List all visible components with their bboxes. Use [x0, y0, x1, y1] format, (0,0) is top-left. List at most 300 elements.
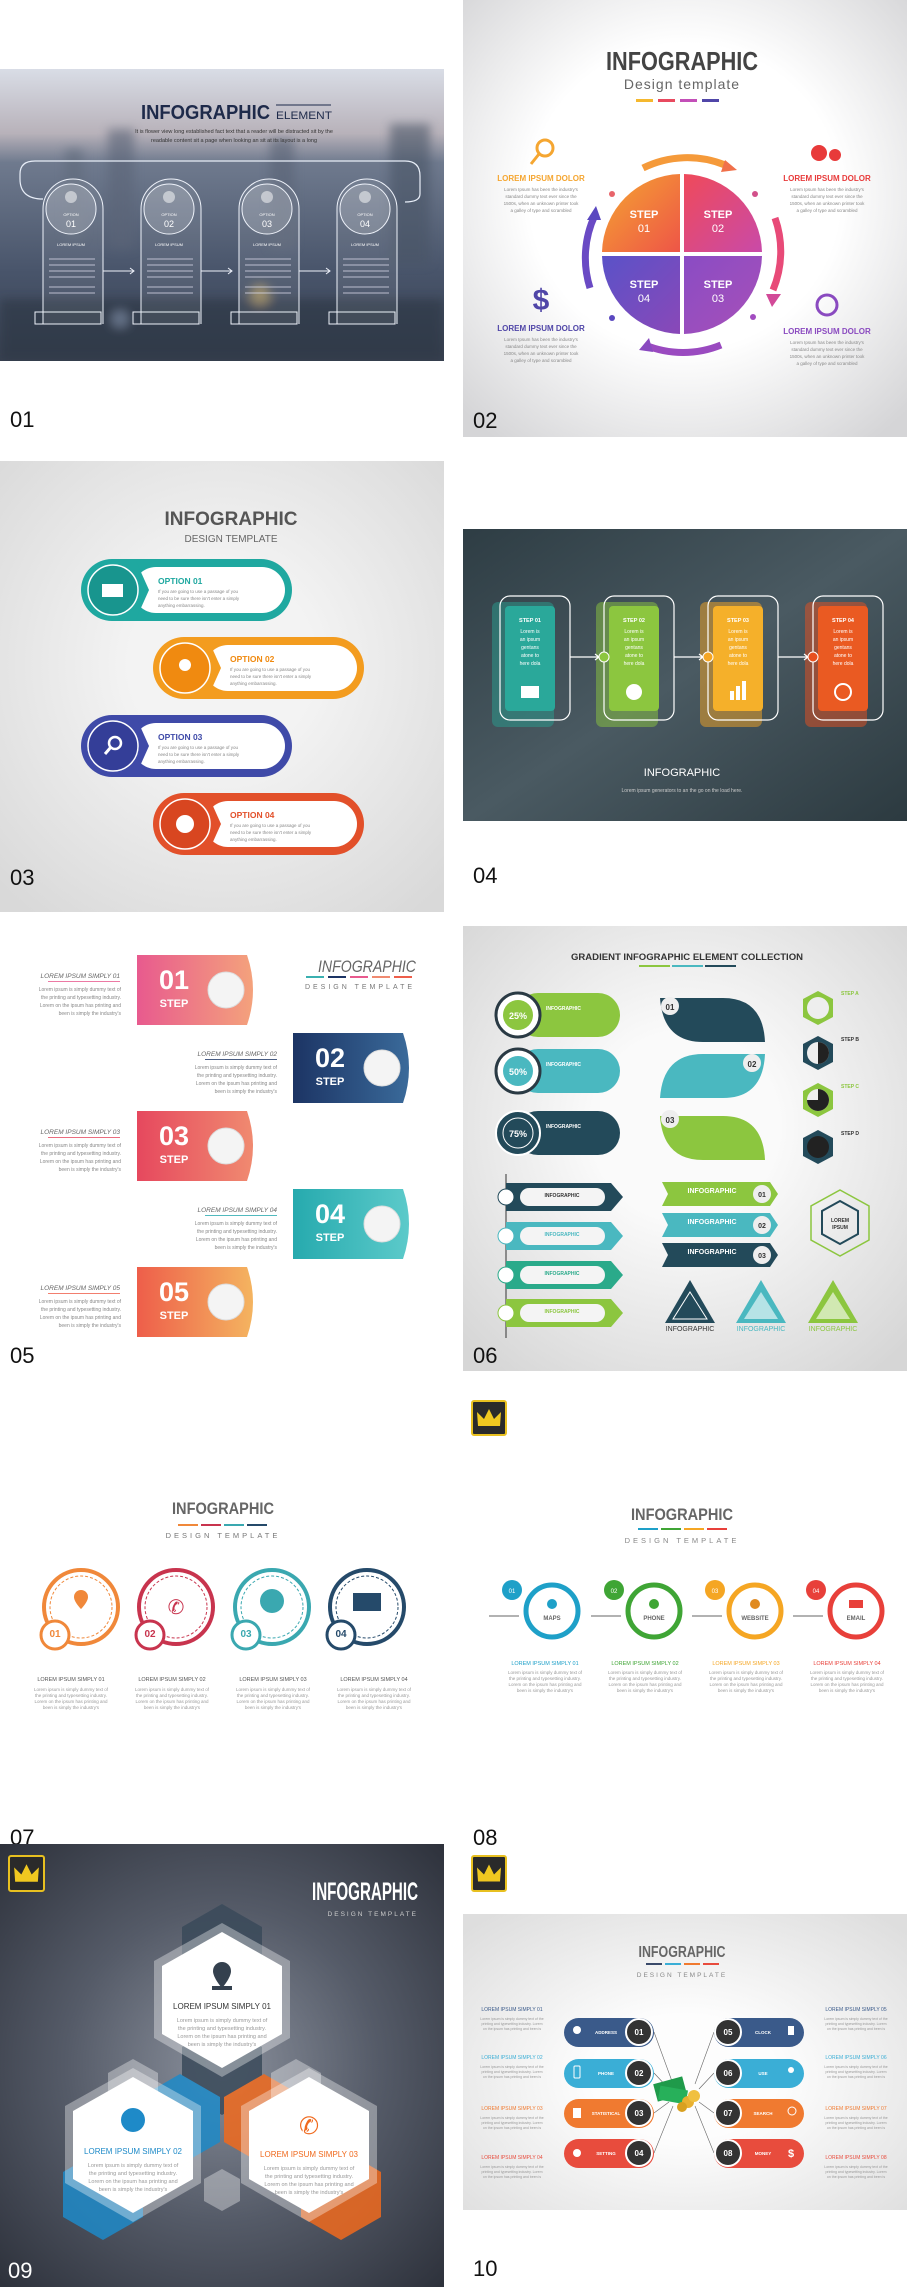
option cards: OPTION [259, 212, 275, 217]
hex top: the printing and typesetting industry. [178, 2026, 266, 2032]
option 01: need to be sure there isn't enter a simply [158, 596, 240, 601]
icon: gears [811, 145, 841, 161]
hex bottom-right: Lorem ipsum is simply dummy text of [264, 2166, 355, 2172]
label 02: 02 [473, 408, 497, 433]
step cards: an ipsum [624, 637, 644, 643]
option cards: OPTION [63, 212, 79, 217]
arrow tags left: INFOGRAPHIC [544, 1232, 580, 1238]
step texts: Lorem ipsum is simply dummy text of [608, 1670, 683, 1675]
ribbon tags right: INFOGRAPHIC [688, 1219, 736, 1226]
icon: magnifier [531, 140, 553, 164]
puzzle circle [602, 174, 762, 334]
option 03: If you are going to use a passage of you [158, 745, 239, 750]
title: DESIGN TEMPLATE [625, 1536, 739, 1545]
contact circles: 04 [813, 1589, 820, 1595]
puzzle circle: STEP [704, 279, 732, 291]
step texts: the printing and typesetting industry. [136, 1693, 208, 1698]
text blocks: a galley of type and scrambled [796, 208, 858, 213]
right pills: CLOCK [755, 2030, 772, 2035]
text blocks: standard dummy text ever since the [505, 194, 577, 199]
title: INFOGRAPHIC [318, 957, 417, 976]
right pills: 08 [724, 2149, 733, 2158]
contact circles: MAPS [543, 1616, 561, 1622]
step texts: Lorem on the ipsum has printing and [40, 1315, 121, 1321]
text blocks: Lorem Ipsum has been the industry's [504, 337, 579, 342]
hex top: been is simply the industry's [188, 2042, 257, 2048]
hex bottom-right: LOREM IPSUM SIMPLY 03 [260, 2150, 359, 2159]
step cards: gentans [625, 645, 643, 651]
step texts: Lorem on the ipsum has printing and [508, 1682, 582, 1687]
title [166, 1499, 280, 1540]
panel 03: option pills [0, 461, 444, 912]
hex top: LOREM IPSUM SIMPLY 01 [173, 2002, 272, 2011]
title: ELEMENT [276, 110, 332, 122]
ribbon tags right: LOREM [831, 1218, 849, 1224]
step texts: been is simply the industry's [346, 1705, 403, 1710]
option 01: If you are going to use a passage of you [158, 589, 239, 594]
left pills: PHONE [598, 2071, 614, 2076]
arrow tags left [498, 1174, 623, 1338]
step texts: been is simply the industry's [59, 1011, 121, 1017]
side texts [480, 2007, 888, 2179]
triangles: INFOGRAPHIC [737, 1326, 785, 1333]
side texts: LOREM IPSUM SIMPLY 05 [825, 2007, 887, 2013]
step texts: Lorem on the ipsum has printing and [135, 1699, 209, 1704]
title: DESIGN TEMPLATE [185, 534, 278, 545]
step cards: gentans [521, 645, 539, 651]
step texts: been is simply the industry's [819, 1688, 876, 1693]
option 04: OPTION 04 [230, 810, 275, 820]
side texts: Lorem ipsum is simply dummy text of the [824, 2165, 888, 2169]
title: DESIGN TEMPLATE [637, 1972, 727, 1979]
step texts: LOREM IPSUM SIMPLY 01 [41, 973, 120, 980]
option cards: 03 [262, 219, 272, 229]
step texts: Lorem ipsum is simply dummy text of [39, 1299, 122, 1305]
percentage pills: INFOGRAPHIC [546, 1124, 581, 1130]
side texts: LOREM IPSUM SIMPLY 01 [481, 2007, 543, 2013]
option 02: anything embarrassing. [230, 681, 277, 686]
step texts: the printing and typesetting industry. [197, 1073, 277, 1079]
label 08: 08 [473, 1825, 497, 1850]
side texts: LOREM IPSUM SIMPLY 07 [825, 2106, 887, 2112]
step 04 [293, 1189, 409, 1259]
title [305, 957, 417, 991]
title [625, 1505, 739, 1545]
ribbon tags right: INFOGRAPHIC [688, 1188, 736, 1195]
icon: alarm clock [817, 295, 837, 315]
left pills: 03 [635, 2109, 644, 2118]
option 04: anything embarrassing. [230, 837, 277, 842]
text blocks: standard dummy text ever since the [505, 344, 577, 349]
step texts [508, 1661, 885, 1693]
step texts: Lorem on the ipsum has printing and [40, 1003, 121, 1009]
step texts: Lorem on the ipsum has printing and [709, 1682, 783, 1687]
step texts: been is simply the industry's [59, 1323, 121, 1329]
step cards [492, 596, 883, 727]
step cards: here dola [624, 661, 645, 667]
step cards: an ipsum [728, 637, 748, 643]
step cards: gentans [729, 645, 747, 651]
hex bottom-left: Lorem on the ipsum has printing and [88, 2179, 178, 2185]
text blocks: a galley of type and scrambled [510, 358, 572, 363]
step texts: Lorem on the ipsum has printing and [34, 1699, 108, 1704]
hex bottom-right: Lorem on the ipsum has printing and [264, 2182, 354, 2188]
step cards: Lorem is [833, 629, 853, 635]
text blocks: 1500s, when an unknown printer took [790, 201, 865, 206]
side texts: LOREM IPSUM SIMPLY 04 [481, 2155, 543, 2161]
side texts: Lorem ipsum is simply dummy text of the [824, 2116, 888, 2120]
hexagon steps [803, 991, 859, 1164]
text blocks: LOREM IPSUM DOLOR [783, 174, 871, 183]
side texts: LOREM IPSUM SIMPLY 03 [481, 2106, 543, 2112]
step texts: the printing and typesetting industry. [609, 1676, 681, 1681]
step texts: been is simply the industry's [718, 1688, 775, 1693]
hexagon steps: STEP D [841, 1131, 859, 1137]
text blocks [497, 174, 871, 366]
step texts: LOREM IPSUM SIMPLY 03 [41, 1129, 120, 1136]
title [312, 1878, 418, 1918]
percentage pills: 50% [509, 1067, 527, 1077]
option cards: 01 [66, 219, 76, 229]
crown badge 1 [471, 1400, 507, 1436]
icon: money stack [653, 2076, 700, 2112]
connector arrows [570, 654, 808, 660]
connector lines [654, 2032, 714, 2153]
label 03: 03 [10, 865, 34, 890]
step cards: an ipsum [833, 637, 853, 643]
step cards: here dola [520, 661, 541, 667]
label 01: 01 [10, 407, 34, 432]
step texts: been is simply the industry's [215, 1089, 277, 1095]
label 09: 09 [8, 2258, 32, 2283]
hex bottom-right [241, 2068, 377, 2222]
side texts: Lorem ipsum is simply dummy text of the [480, 2065, 544, 2069]
side texts: LOREM IPSUM SIMPLY 02 [481, 2055, 543, 2061]
step texts: Lorem ipsum is simply dummy text of [195, 1221, 278, 1227]
hex bottom-left [65, 2068, 201, 2222]
step texts: the printing and typesetting industry. [197, 1229, 277, 1235]
step 01: 01 [159, 965, 189, 995]
step texts: Lorem ipsum is simply dummy text of [135, 1687, 210, 1692]
ribbon tags right: IPSUM [832, 1225, 848, 1231]
side texts: printing and typesetting industry. Lorem [825, 2022, 887, 2026]
step texts: the printing and typesetting industry. [41, 1151, 121, 1157]
title: Lorem ipsum generators to an the go on the load here. [622, 788, 742, 794]
panel 01: glass infographic element on city background [0, 69, 444, 361]
step texts: the printing and typesetting industry. [41, 995, 121, 1001]
option cards: LOREM IPSUM [155, 242, 183, 247]
ribbon tags right: 03 [758, 1253, 766, 1260]
step cards: atone to [625, 653, 643, 659]
step texts: Lorem on the ipsum has printing and [196, 1237, 277, 1243]
side texts: printing and typesetting industry. Lorem [481, 2070, 543, 2074]
left pills: 04 [635, 2149, 644, 2158]
side texts: LOREM IPSUM SIMPLY 08 [825, 2155, 887, 2161]
text blocks: standard dummy text ever since the [791, 194, 863, 199]
step texts: LOREM IPSUM SIMPLY 02 [611, 1661, 679, 1667]
left pills [564, 2018, 654, 2168]
leaf shapes [660, 997, 765, 1160]
text blocks: a galley of type and scrambled [510, 208, 572, 213]
left pills: ADDRESS [595, 2030, 617, 2035]
right pills: 06 [724, 2069, 733, 2078]
title [164, 509, 298, 545]
step texts: the printing and typesetting industry. [35, 1693, 107, 1698]
side texts: Lorem ipsum is simply dummy text of the [480, 2116, 544, 2120]
puzzle circle: 03 [712, 293, 724, 305]
option 02: OPTION 02 [230, 654, 275, 664]
title: DESIGN TEMPLATE [305, 984, 415, 991]
contact circles: WEBSITE [741, 1616, 769, 1622]
text blocks: standard dummy text ever since the [791, 347, 863, 352]
side texts: printing and typesetting industry. Lorem [481, 2022, 543, 2026]
title: INFOGRAPHIC [141, 102, 270, 124]
step 03 [137, 1111, 253, 1181]
panel 05: step blocks [10, 955, 417, 1368]
step cards: Lorem is [624, 629, 644, 635]
step texts: LOREM IPSUM SIMPLY 05 [41, 1285, 120, 1292]
leaf shapes: 03 [666, 1116, 675, 1125]
side texts: on the ipsum has printing and been is [483, 2075, 541, 2079]
hexagon steps: STEP B [841, 1037, 859, 1043]
step cards: Lorem is [728, 629, 748, 635]
percentage pills: INFOGRAPHIC [546, 1006, 581, 1012]
step 03: 03 [159, 1121, 189, 1151]
contact circles: EMAIL [847, 1616, 866, 1622]
title: INFOGRAPHIC [172, 1499, 274, 1518]
panel 06: gradient infographic element collection [463, 926, 907, 1371]
step texts: Lorem ipsum is simply dummy text of [337, 1687, 412, 1692]
side texts: on the ipsum has printing and been is [483, 2027, 541, 2031]
title: INFOGRAPHIC [638, 1944, 726, 1961]
option cards: 02 [164, 219, 174, 229]
step texts: Lorem ipsum is simply dummy text of [39, 1143, 122, 1149]
title: INFOGRAPHIC [606, 46, 758, 76]
step texts: been is simply the industry's [59, 1167, 121, 1173]
hexagon steps: STEP A [841, 991, 859, 997]
side texts: on the ipsum has printing and been is [483, 2126, 541, 2130]
text blocks: LOREM IPSUM DOLOR [497, 324, 585, 333]
triangles [665, 1280, 858, 1333]
step cards: an ipsum [520, 637, 540, 643]
panel 08: contact circles [489, 1505, 885, 1693]
step texts: LOREM IPSUM SIMPLY 04 [198, 1207, 277, 1214]
right pills [714, 2018, 804, 2168]
ribbon tags right: INFOGRAPHIC [688, 1249, 736, 1256]
side texts: on the ipsum has printing and been is [827, 2126, 885, 2130]
step texts: been is simply the industry's [144, 1705, 201, 1710]
option cards: OPTION [357, 212, 373, 217]
step texts: LOREM IPSUM SIMPLY 04 [813, 1661, 881, 1667]
step cards: STEP 03 [727, 618, 749, 624]
right pills: 07 [724, 2109, 733, 2118]
circles: 01 [49, 1629, 61, 1640]
arrow tags left: INFOGRAPHIC [544, 1309, 580, 1315]
option cards: OPTION [161, 212, 177, 217]
option 02 [153, 637, 364, 699]
step texts: been is simply the industry's [617, 1688, 674, 1693]
hex bottom-right: the printing and typesetting industry. [265, 2174, 353, 2180]
hex top: Lorem on the ipsum has printing and [177, 2034, 267, 2040]
step texts: Lorem on the ipsum has printing and [196, 1081, 277, 1087]
side texts: printing and typesetting industry. Lorem [825, 2121, 887, 2125]
contact circles [489, 1580, 882, 1637]
step 04: 04 [315, 1199, 345, 1229]
panel 04: step cards on dark photo [463, 529, 907, 821]
step 01: STEP [160, 998, 188, 1010]
percentage pills: INFOGRAPHIC [546, 1062, 581, 1068]
option 04: need to be sure there isn't enter a simply [230, 830, 312, 835]
step texts: Lorem ipsum is simply dummy text of [39, 987, 122, 993]
label 04: 04 [473, 863, 497, 888]
step cards: gentans [834, 645, 852, 651]
side texts: Lorem ipsum is simply dummy text of the [824, 2065, 888, 2069]
text blocks: 1500s, when an unknown printer took [504, 351, 579, 356]
title: INFOGRAPHIC [164, 509, 298, 530]
label 05: 05 [10, 1343, 34, 1368]
step cards: STEP 02 [623, 618, 645, 624]
option 01 [81, 559, 292, 621]
option 03 [81, 715, 292, 777]
option cards: LOREM IPSUM [253, 242, 281, 247]
step texts: been is simply the industry's [517, 1688, 574, 1693]
circles: 02 [144, 1629, 156, 1640]
puzzle circle: 02 [712, 223, 724, 235]
step texts: LOREM IPSUM SIMPLY 03 [239, 1677, 307, 1683]
option cards [35, 179, 397, 324]
step texts: been is simply the industry's [215, 1245, 277, 1251]
step cards: Lorem is [520, 629, 540, 635]
step 05: 05 [159, 1277, 189, 1307]
step 05 [137, 1267, 253, 1337]
right pills: USE [758, 2071, 768, 2076]
label 06: 06 [473, 1343, 497, 1368]
circles [41, 1570, 404, 1649]
puzzle circle: 01 [638, 223, 650, 235]
panel 02: puzzle circle infographic [463, 0, 907, 437]
subtitle text: readable content sit a page when looking an sit at its layout is a long [151, 138, 317, 144]
crown badge 2 [8, 1855, 45, 1892]
triangles: INFOGRAPHIC [809, 1326, 857, 1333]
right pills: MONEY [755, 2151, 771, 2156]
label 07: 07 [10, 1825, 34, 1850]
puzzle circle: STEP [630, 279, 658, 291]
step cards: here dola [833, 661, 854, 667]
hex bottom-left: the printing and typesetting industry. [89, 2171, 177, 2177]
step texts: Lorem ipsum is simply dummy text of [508, 1670, 583, 1675]
subtitle text: It is flower view long established fact text that a reader will be distracted sit by the [135, 129, 333, 135]
puzzle circle: STEP [704, 209, 732, 221]
hex bottom-left: been is simply the industry's [99, 2187, 168, 2193]
step texts: the printing and typesetting industry. [509, 1676, 581, 1681]
panel 09: hexagon infographic on dark [0, 1844, 444, 2287]
step cards: STEP 01 [519, 618, 541, 624]
step texts: Lorem on the ipsum has printing and [608, 1682, 682, 1687]
circles: 03 [240, 1629, 252, 1640]
step 05: STEP [160, 1310, 188, 1322]
contact circles: 03 [712, 1589, 719, 1595]
arrow tags left: INFOGRAPHIC [544, 1271, 580, 1277]
step texts: been is simply the industry's [43, 1705, 100, 1710]
icon: dollar: $ [533, 284, 550, 317]
step 03: STEP [160, 1154, 188, 1166]
step cards: STEP 04 [832, 618, 855, 624]
left pills: 01 [635, 2028, 644, 2037]
option 01: OPTION 01 [158, 576, 203, 586]
left pills: 02 [635, 2069, 644, 2078]
ribbon tags right: 01 [758, 1192, 766, 1199]
text blocks: a galley of type and scrambled [796, 361, 858, 366]
option 04: If you are going to use a passage of you [230, 823, 311, 828]
left pills: SETTING [596, 2151, 616, 2156]
circles: ✆ [168, 1597, 184, 1619]
title: DESIGN TEMPLATE [166, 1531, 280, 1540]
title: INFOGRAPHIC [644, 767, 720, 779]
step texts: LOREM IPSUM SIMPLY 04 [340, 1677, 408, 1683]
text blocks: LOREM IPSUM DOLOR [783, 327, 871, 336]
percentage pills: 75% [509, 1129, 527, 1139]
text blocks: Lorem Ipsum has been the industry's [790, 340, 865, 345]
label 10: 10 [473, 2256, 497, 2281]
subtitle text [135, 129, 333, 144]
contact circles: PHONE [643, 1616, 665, 1622]
percentage pills: 25% [509, 1011, 527, 1021]
option cards: 04 [360, 219, 370, 229]
title: Design template [624, 76, 740, 92]
step texts: Lorem ipsum is simply dummy text of [810, 1670, 885, 1675]
step cards: atone to [834, 653, 852, 659]
side texts: on the ipsum has printing and been is [827, 2075, 885, 2079]
step texts: LOREM IPSUM SIMPLY 01 [37, 1677, 105, 1683]
triangles: INFOGRAPHIC [666, 1326, 714, 1333]
hex top [154, 1923, 290, 2077]
step 02: 02 [315, 1043, 345, 1073]
puzzle circle: 04 [638, 293, 650, 305]
side texts: printing and typesetting industry. Lorem [825, 2070, 887, 2074]
hex top: Lorem ipsum is simply dummy text of [177, 2018, 268, 2024]
title: GRADIENT INFOGRAPHIC ELEMENT COLLECTION [571, 952, 803, 963]
option 03: anything embarrassing. [158, 759, 205, 764]
option 02: If you are going to use a passage of you [230, 667, 311, 672]
text blocks: 1500s, when an unknown printer took [790, 354, 865, 359]
right pills: SEARCH [753, 2111, 773, 2116]
step texts: Lorem on the ipsum has printing and [236, 1699, 310, 1704]
accent hexes [63, 1904, 381, 2240]
step texts: LOREM IPSUM SIMPLY 02 [198, 1051, 277, 1058]
leaf shapes: 01 [666, 1003, 675, 1012]
title [622, 767, 742, 794]
step texts: Lorem on the ipsum has printing and [810, 1682, 884, 1687]
step cards: here dola [728, 661, 749, 667]
hex bottom-left: Lorem ipsum is simply dummy text of [88, 2163, 179, 2169]
side texts: Lorem ipsum is simply dummy text of the [824, 2017, 888, 2021]
side texts: Lorem ipsum is simply dummy text of the [480, 2017, 544, 2021]
right pills: 05 [724, 2028, 733, 2037]
option cards: LOREM IPSUM [57, 242, 85, 247]
option 02: need to be sure there isn't enter a simply [230, 674, 312, 679]
circles: 04 [335, 1629, 347, 1640]
step texts: LOREM IPSUM SIMPLY 02 [138, 1677, 206, 1683]
title: DESIGN TEMPLATE [328, 1911, 418, 1918]
text blocks: LOREM IPSUM DOLOR [497, 174, 585, 183]
step texts: the printing and typesetting industry. [811, 1676, 883, 1681]
hex bottom-right: ✆ [299, 2113, 319, 2140]
side texts: printing and typesetting industry. Lorem [825, 2170, 887, 2174]
title [606, 46, 758, 102]
option 01: anything embarrassing. [158, 603, 205, 608]
contact circles: 01 [509, 1589, 516, 1595]
step cards: atone to [521, 653, 539, 659]
